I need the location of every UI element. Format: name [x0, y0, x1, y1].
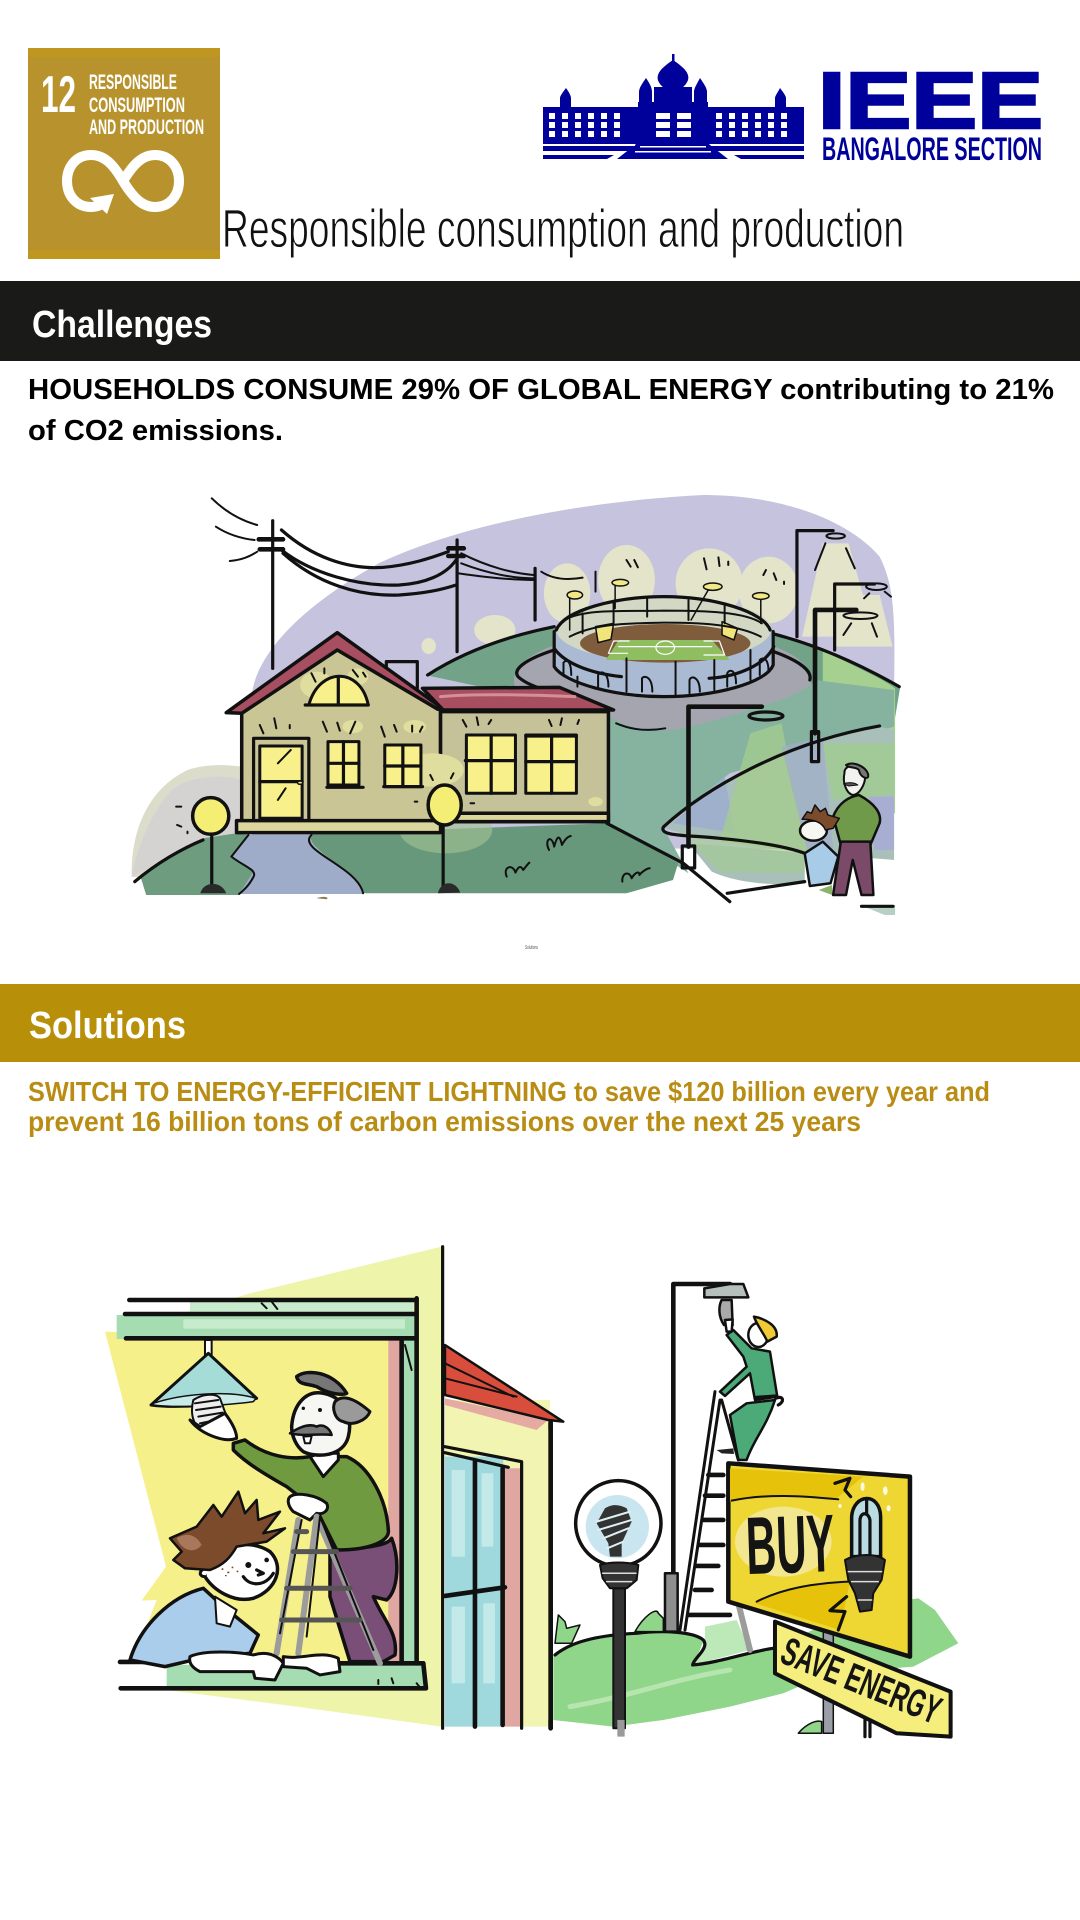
street lights — [682, 531, 891, 868]
grass — [553, 1598, 958, 1733]
save energy sign — [775, 1622, 951, 1737]
pendant lamp — [151, 1340, 257, 1430]
stray mark: Solutions — [525, 945, 538, 951]
hill outlines — [135, 627, 899, 902]
buy sign — [728, 1463, 910, 1657]
garden lamp with spiral bulb — [576, 1481, 661, 1737]
window frame — [117, 1247, 443, 1728]
icon: SDG 12 tile: RESPONSIBLE — [89, 71, 177, 94]
illustration: lit house, stadium and street lights — [132, 495, 900, 915]
text block: solution statement — [28, 1076, 990, 1137]
hills and road — [141, 627, 900, 895]
corner fragment — [860, 905, 895, 915]
man on ladder — [190, 1372, 397, 1662]
icon: CFL bulb — [845, 1499, 885, 1612]
illustration: street lamp, worker and buy sign — [530, 1284, 958, 1737]
icon: SDG 12 tile: AND PRODUCTION — [89, 116, 204, 139]
text block: solution statement: prevent 16 billion tons of carbon emissions over the next 25 years — [28, 1106, 861, 1137]
garden lamps — [176, 773, 474, 893]
heading bar: Solutions: Solutions — [29, 1005, 186, 1047]
icon: Vidhana Soudha palace — [543, 54, 804, 159]
heading bar: Solutions — [0, 984, 1080, 1062]
logo: IEEE Bangalore Section — [543, 54, 1043, 167]
heading bar: Challenges: Challenges — [32, 304, 212, 346]
logo wordmark: IEEE: IEEE — [818, 56, 1043, 145]
tiny marks — [378, 1678, 419, 1687]
heading bar: Challenges — [0, 281, 1080, 361]
illustration: father and son changing a bulb at the window — [105, 1247, 563, 1728]
figures: father and son looking on — [800, 763, 880, 895]
utility poles and wires — [212, 498, 583, 668]
stepladder — [277, 1517, 380, 1663]
street lamp pole — [665, 1284, 748, 1632]
signpost — [823, 1627, 870, 1737]
worker — [720, 1317, 782, 1460]
house — [226, 633, 614, 833]
house side wall — [445, 1345, 563, 1728]
stadium — [554, 557, 784, 697]
text block: solution statement: SWITCH TO ENERGY-EFFICIENT LIGHTNING to save $120 billion every year and — [28, 1076, 990, 1107]
icon: SDG 12 tile: CONSUMPTION — [89, 94, 185, 117]
icon: SDG 12 tile: 12 — [41, 66, 76, 124]
sign text: SAVE ENERGY: SAVE ENERGY — [775, 1629, 947, 1733]
sign text: BUY: BUY — [744, 1498, 836, 1592]
text block: challenge statement: of CO2 emissions. — [28, 415, 283, 447]
boy at window — [130, 1492, 340, 1680]
grass tufts — [506, 836, 650, 882]
text block: challenge statement — [28, 374, 1054, 447]
window light — [105, 1247, 442, 1727]
sky blobs — [132, 495, 894, 880]
tall ladder — [680, 1392, 750, 1650]
text block: challenge statement: HOUSEHOLDS CONSUME 29% OF GLOBAL ENERGY contributing to 21% — [28, 374, 1054, 406]
icon: SDG 12 tile — [28, 48, 220, 259]
house edge — [530, 1423, 551, 1728]
